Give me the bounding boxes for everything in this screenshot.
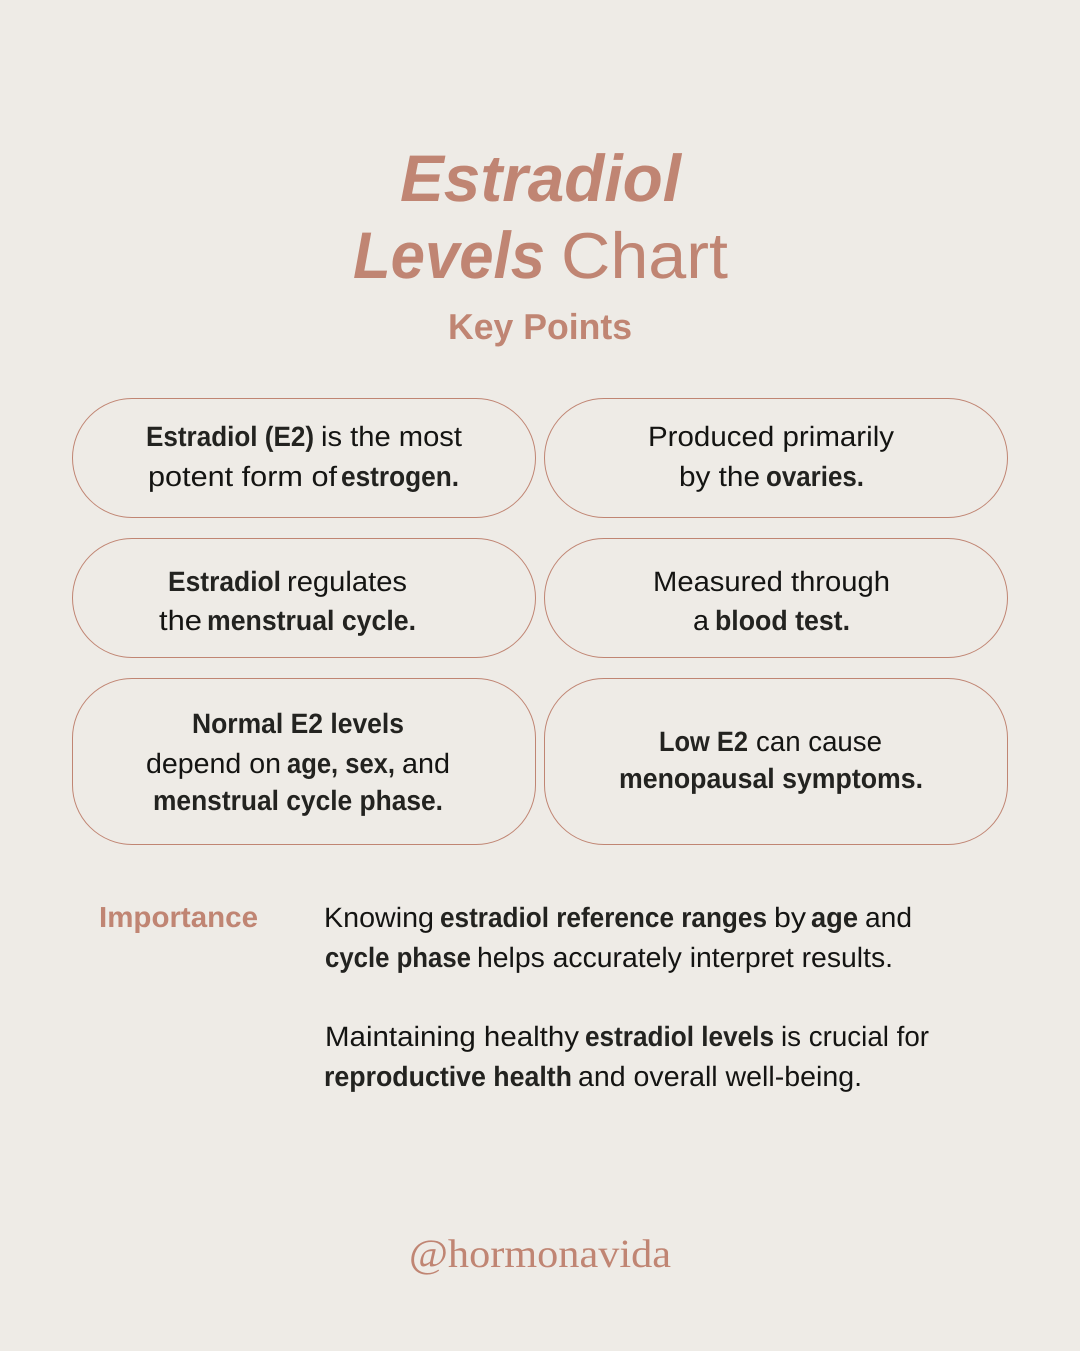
panel text: menstrual cycle: menstrual cycle. bbox=[207, 605, 416, 636]
panel text: low E2 bbox=[619, 726, 923, 794]
importance paragraph 2: estradiol levels bbox=[585, 1021, 774, 1052]
importance paragraph 1: age bbox=[811, 902, 858, 933]
handle: @hormonavida bbox=[409, 1231, 671, 1276]
panel text: normal levels: menstrual cycle phase. bbox=[153, 785, 443, 816]
panel: low E2 bbox=[544, 678, 1008, 844]
importance paragraph 1: helps accurately interpret results. bbox=[477, 942, 893, 973]
panel text: ovaries: ovaries. bbox=[766, 461, 864, 492]
panel text: potent form bbox=[146, 421, 462, 492]
panel text: normal levels: Normal E2 levels bbox=[192, 708, 404, 739]
title bbox=[353, 141, 728, 292]
panel text: menstrual cycle: regulates bbox=[287, 566, 407, 597]
panel text: blood test: a bbox=[693, 605, 709, 636]
panel text: menstrual cycle: Estradiol bbox=[168, 566, 281, 597]
importance paragraph 1: estradiol reference ranges bbox=[440, 902, 767, 933]
panel text: blood test: Measured through bbox=[653, 566, 890, 597]
importance paragraph 2: is crucial for bbox=[781, 1021, 929, 1052]
panel text: blood test: blood test. bbox=[715, 605, 850, 636]
panel text: normal levels: and bbox=[402, 748, 450, 779]
importance paragraph 1: Knowing bbox=[324, 902, 434, 933]
panel text: blood test bbox=[653, 566, 890, 636]
panel text: potent form: Estradiol (E2) bbox=[146, 421, 314, 452]
importance paragraph 1: and bbox=[865, 902, 912, 933]
panel: produced by ovaries bbox=[544, 398, 1008, 518]
panel: potent form of estrogen bbox=[72, 398, 536, 518]
importance paragraph 2 bbox=[324, 1021, 929, 1092]
panel text: potent form: estrogen. bbox=[341, 461, 459, 492]
panel text: normal levels bbox=[146, 708, 450, 816]
importance paragraph 1: cycle phase bbox=[325, 942, 471, 973]
panel text: low E2: Low E2 bbox=[659, 726, 748, 757]
panel text: potent form: potent form of bbox=[148, 461, 337, 492]
importance heading: Importance bbox=[99, 902, 258, 934]
panel text: menstrual cycle bbox=[159, 566, 416, 636]
panel text: menstrual cycle: the bbox=[159, 605, 202, 636]
panel: blood test bbox=[544, 538, 1008, 658]
panel: normal E2 levels bbox=[72, 678, 536, 844]
importance paragraph 1 bbox=[324, 902, 912, 973]
importance paragraph 2: reproductive health bbox=[324, 1061, 572, 1092]
panel text: normal levels: age, sex, bbox=[287, 748, 395, 779]
subtitle: key points: Key Points bbox=[448, 306, 632, 347]
panel text: potent form: is the most bbox=[321, 421, 462, 452]
importance paragraph 2: Maintaining healthy bbox=[325, 1021, 579, 1052]
panel text: ovaries bbox=[648, 421, 894, 492]
panel text: ovaries: Produced primarily bbox=[648, 421, 894, 452]
importance paragraph 1: by bbox=[774, 902, 806, 933]
title: Levels bbox=[353, 218, 545, 292]
panel text: low E2: can cause bbox=[756, 726, 882, 757]
panel: regulates menstrual cycle bbox=[72, 538, 536, 658]
panel text: normal levels: depend on bbox=[146, 748, 281, 779]
title: Estradiol bbox=[400, 141, 683, 215]
title: Chart bbox=[561, 219, 728, 292]
panel text: low E2: menopausal symptoms. bbox=[619, 763, 923, 794]
panel text: ovaries: by the bbox=[679, 461, 760, 492]
importance paragraph 2: and overall well-being. bbox=[578, 1061, 862, 1092]
